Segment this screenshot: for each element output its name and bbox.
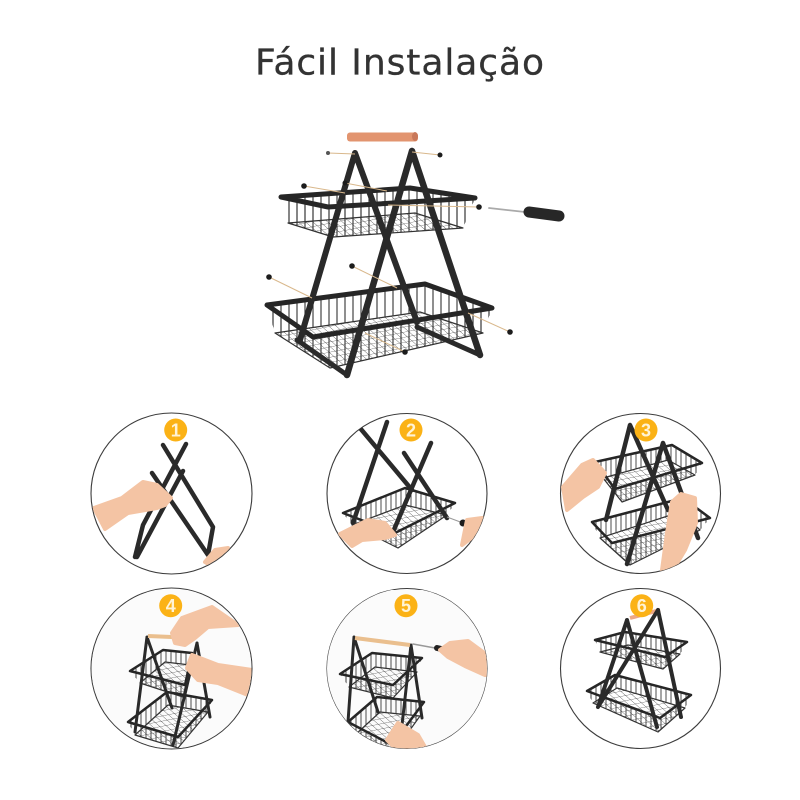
title: Fácil Instalação — [255, 42, 544, 84]
lower basket — [128, 692, 212, 748]
basket — [343, 488, 455, 548]
badge 4 — [159, 594, 182, 617]
hands — [172, 607, 252, 695]
upper basket — [595, 445, 702, 502]
wooden handle — [355, 638, 410, 645]
lower basket — [592, 498, 710, 565]
frames — [598, 610, 681, 727]
badge 5: 5 — [401, 596, 411, 616]
folded frames — [135, 444, 213, 557]
badge 3 — [634, 418, 658, 442]
step 3 circle — [560, 414, 720, 574]
frames — [135, 637, 210, 745]
badge 3: 3 — [641, 420, 651, 440]
badge 6 — [630, 594, 653, 617]
step 1 circle — [91, 413, 252, 574]
badge 6: 6 — [637, 596, 647, 616]
frames — [348, 637, 422, 725]
badge 4: 4 — [166, 596, 176, 616]
badge 1: 1 — [171, 420, 181, 440]
front A-frame — [347, 151, 480, 375]
lower basket — [587, 675, 691, 732]
step 4 circle — [90, 588, 255, 750]
lower basket — [348, 697, 424, 755]
wooden handle — [148, 636, 195, 638]
rear A-frame — [297, 153, 480, 375]
screw — [447, 517, 466, 526]
background tint — [90, 590, 255, 750]
hands — [563, 460, 696, 570]
upper basket — [340, 653, 422, 698]
wooden handle — [630, 610, 660, 618]
badge 5 — [394, 594, 418, 617]
wooden handle — [347, 132, 418, 142]
screws — [266, 151, 513, 355]
background tint — [325, 590, 490, 750]
screwdriver — [412, 643, 442, 652]
badge 2: 2 — [406, 420, 416, 440]
frames — [353, 422, 447, 532]
hands — [94, 482, 228, 566]
step 5 circle — [325, 588, 490, 755]
upper basket — [595, 632, 687, 669]
icon: screwdriver — [489, 208, 559, 216]
hands — [387, 641, 487, 748]
badge 2 — [400, 418, 422, 442]
step 2 circle — [327, 414, 487, 574]
step 6 circle — [560, 588, 720, 748]
hands — [340, 518, 482, 546]
frames — [606, 425, 698, 564]
upper basket — [281, 188, 475, 237]
badge 1 — [164, 418, 187, 442]
exploded product illustration — [266, 132, 559, 375]
upper basket — [130, 650, 192, 697]
lower basket — [267, 284, 492, 368]
